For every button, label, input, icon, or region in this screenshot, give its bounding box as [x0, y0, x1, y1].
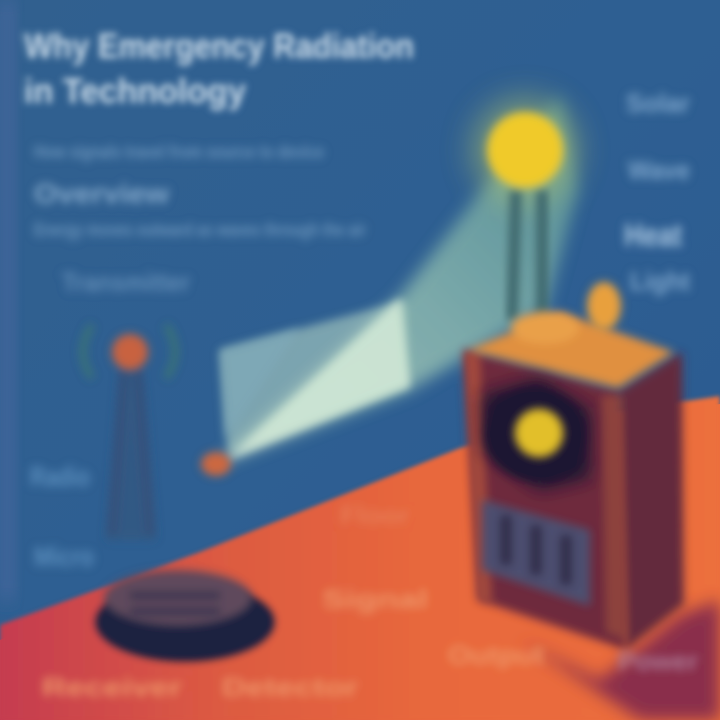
left edge highlight: [0, 0, 14, 600]
left side labels: [30, 461, 94, 572]
box front: [464, 350, 626, 650]
light panel: [220, 300, 408, 455]
tower mast: [114, 373, 148, 540]
intro text block: [34, 142, 366, 297]
title: [24, 27, 414, 111]
sun: [487, 112, 563, 188]
tower beacon: [112, 334, 148, 370]
control panel: [482, 500, 590, 606]
floor labels: Detector: [222, 672, 358, 702]
floor labels: Floor: [340, 500, 410, 530]
box front left edge: [464, 350, 492, 604]
dark screen: [482, 378, 590, 490]
beam of light from emitter to sun: [215, 95, 578, 465]
intro text block: Overview: [34, 178, 169, 209]
right side labels: [624, 88, 690, 296]
emitter dot: [201, 452, 231, 476]
right side labels: Wave: [628, 155, 690, 185]
right side labels: Solar: [626, 88, 690, 118]
floor device: dark puck: [95, 570, 275, 662]
intro text block: Energy moves outward as waves through the air: [34, 220, 366, 240]
right side labels: Heat: [624, 217, 682, 253]
intro text block: Transmitter: [62, 267, 190, 297]
floor: orange surface: [0, 393, 720, 663]
box top: [468, 312, 674, 388]
left side labels: Micro: [34, 541, 94, 572]
box side: [618, 352, 684, 650]
tower signal arcs: [83, 325, 175, 378]
title: Why Emergency Radiation: [24, 27, 414, 66]
sun pole: [512, 190, 542, 320]
floor labels: Signal: [322, 584, 428, 614]
floor labels: Output: [448, 640, 544, 670]
floor labels: Receiver: [42, 672, 182, 702]
floor labels: Power: [618, 646, 698, 676]
right side labels: Light: [630, 266, 690, 296]
box shadow on floor: [520, 600, 720, 720]
floor base: [0, 404, 720, 720]
intro text block: How signals travel from source to device: [34, 142, 324, 162]
screen sun: [515, 409, 563, 457]
floor labels: [42, 500, 698, 702]
top knob: [587, 282, 621, 330]
device box: [464, 282, 720, 720]
title: in Technology: [24, 72, 246, 111]
left side labels: Radio: [30, 461, 90, 492]
box edge stripe: [602, 395, 626, 640]
radio tower: [83, 325, 175, 540]
sun glow: [473, 98, 577, 202]
